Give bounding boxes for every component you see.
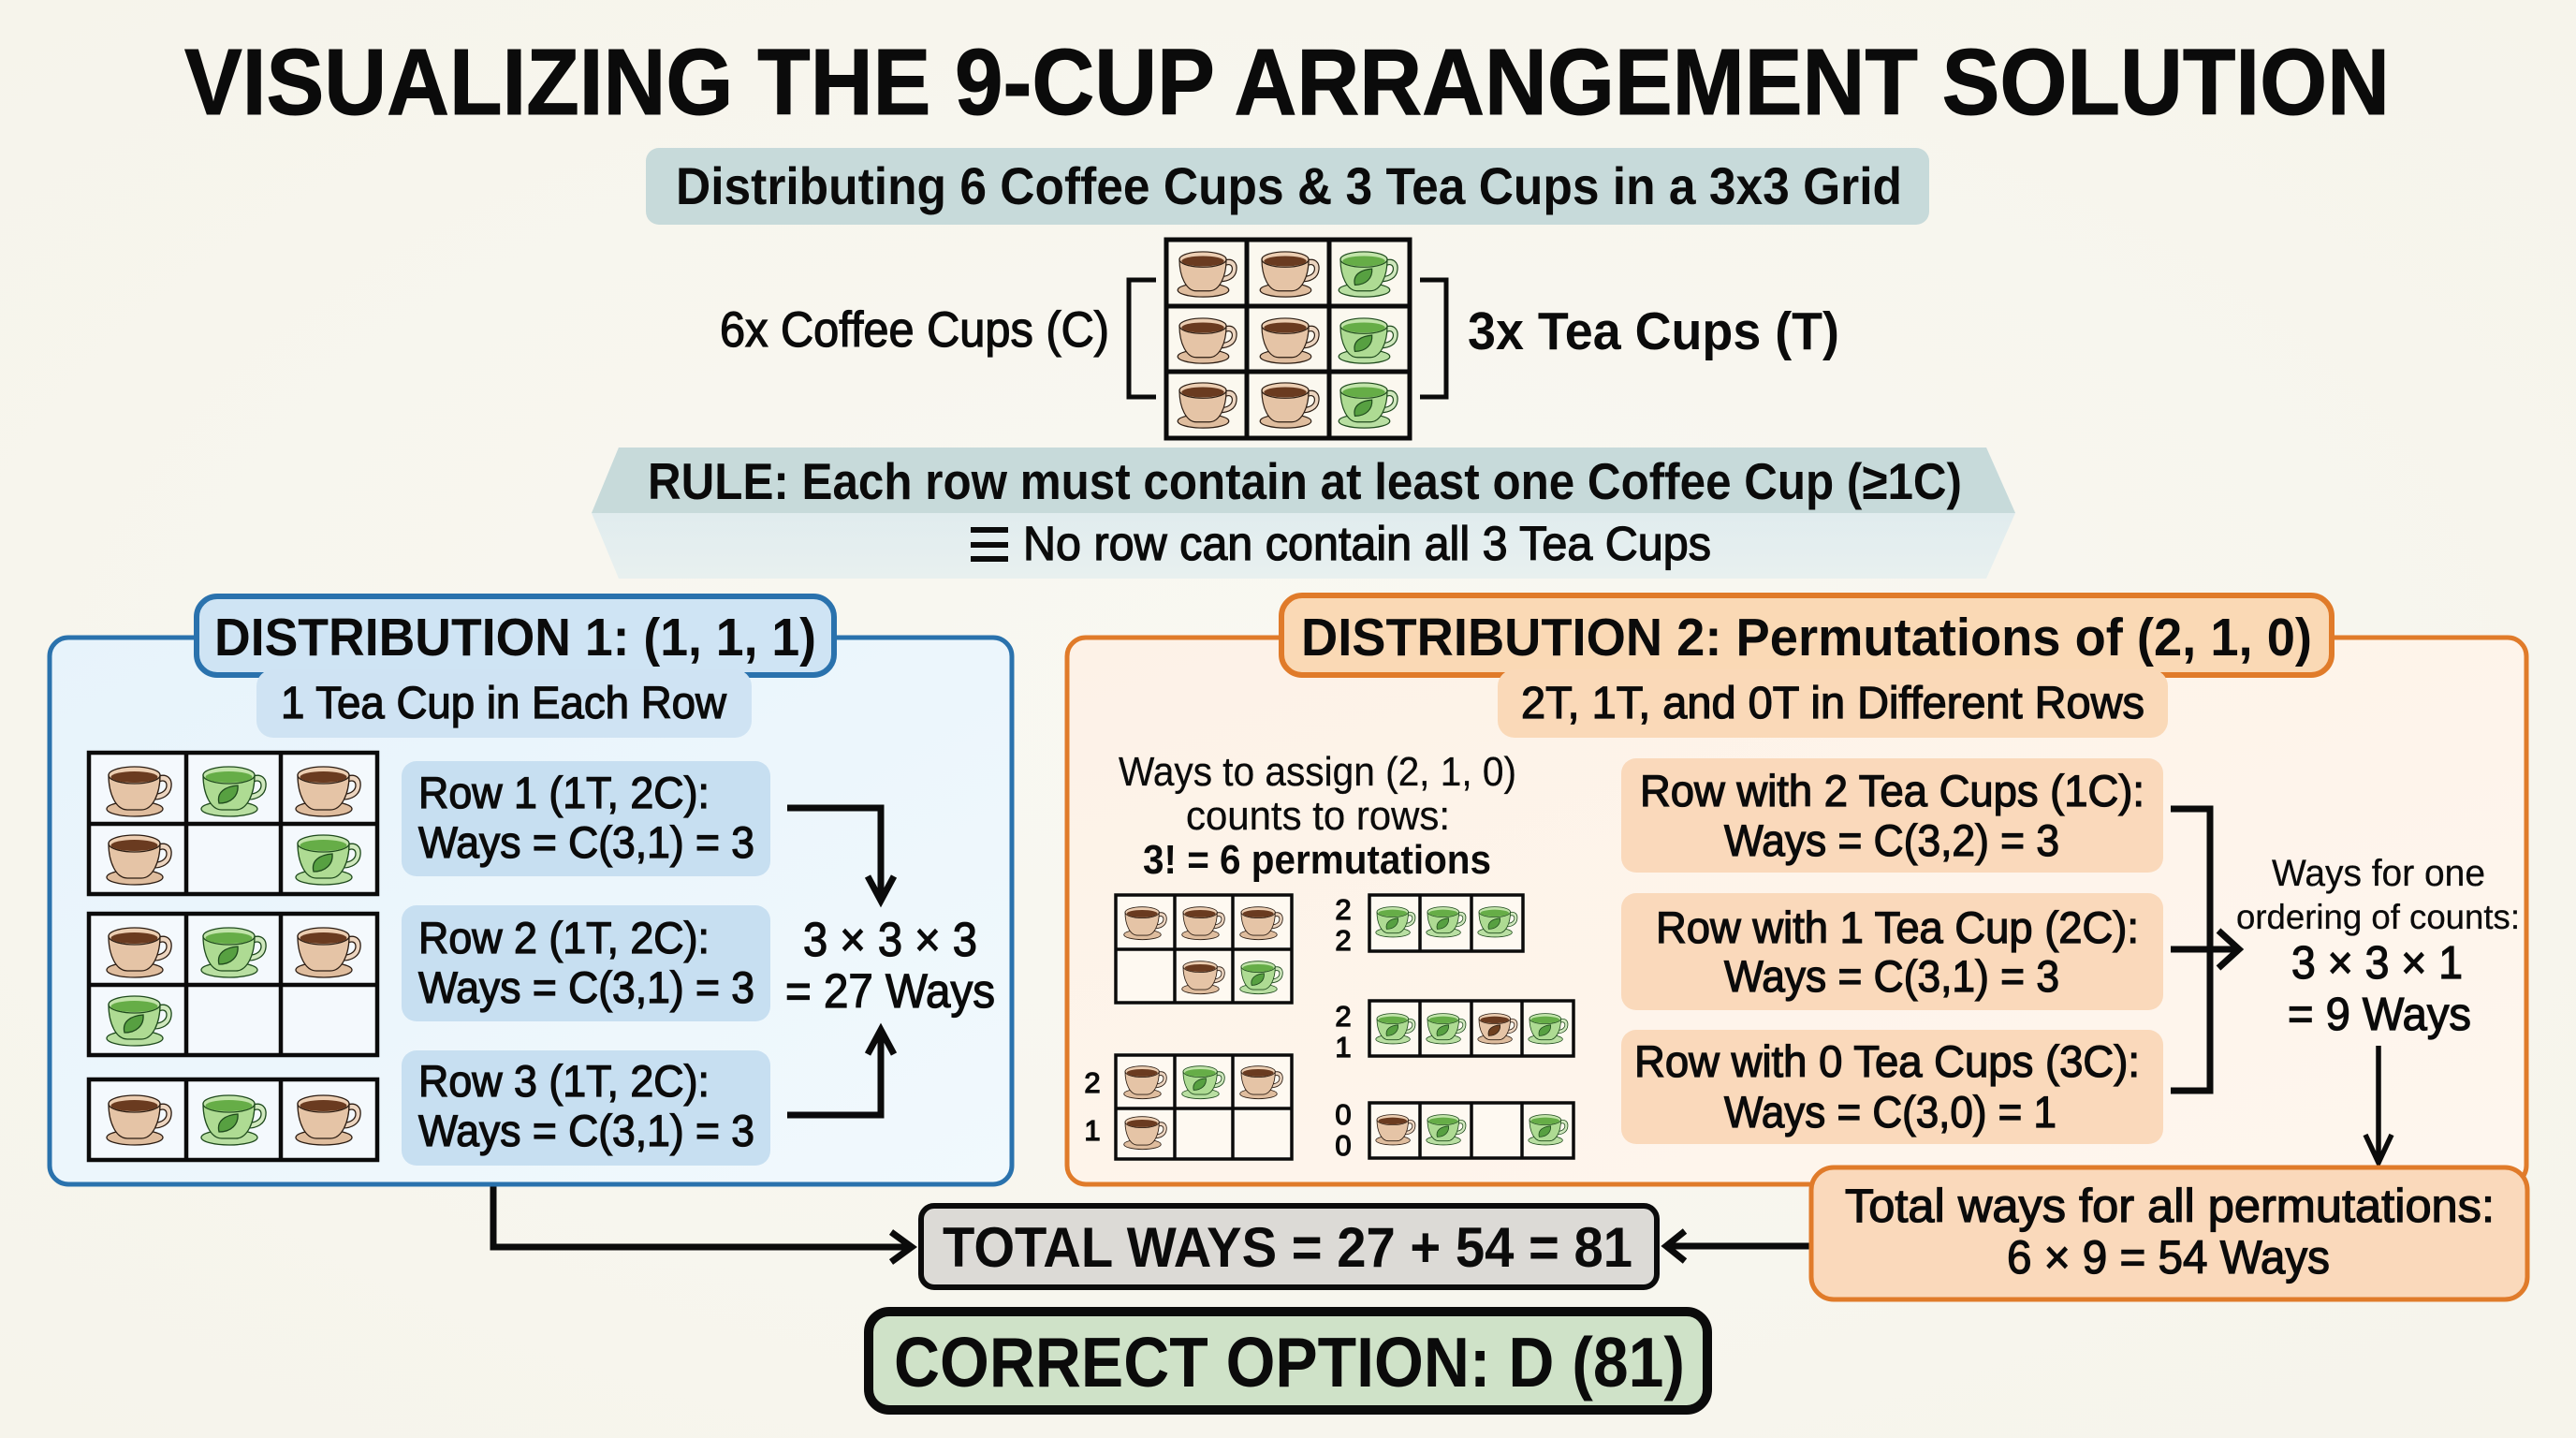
mini grid E with row counts: 0 bbox=[1335, 1098, 1352, 1131]
mini grid B with row counts: 2 bbox=[1084, 1066, 1101, 1099]
mini grid C with row counts bbox=[1335, 893, 1523, 957]
mini grid E with row counts bbox=[1335, 1098, 1573, 1162]
grid: row 2 arrangements bbox=[89, 914, 377, 1055]
text: ways to assign counts bbox=[1119, 749, 1516, 883]
result: ways for one ordering bbox=[2236, 853, 2520, 1040]
label: coffee cups count: 6x Coffee Cups (C) bbox=[720, 302, 1109, 358]
mini grid B with row counts: 1 bbox=[1084, 1114, 1101, 1147]
mini grid D with row counts bbox=[1335, 1000, 1573, 1064]
mini grid D with row counts: 2 bbox=[1335, 1000, 1352, 1033]
title: VISUALIZING THE 9-CUP ARRANGEMENT SOLUTION bbox=[184, 30, 2390, 135]
heading: distribution 2: DISTRIBUTION 2: Permutations of (2, 1, 0) bbox=[1301, 608, 2312, 668]
grid: row 1 arrangements bbox=[89, 753, 377, 894]
row 1 ways: Ways = C(3,1) = 3 bbox=[418, 817, 754, 867]
label: tea cups count: 3x Tea Cups (T) bbox=[1468, 301, 1839, 361]
subtitle banner: Distributing 6 Coffee Cups & 3 Tea Cups in a 3x3 Grid bbox=[676, 156, 1902, 215]
mini grid E with row counts: 0 bbox=[1335, 1129, 1352, 1162]
mini grid B with row counts bbox=[1084, 1055, 1292, 1159]
row with 1 tea cup bbox=[1621, 893, 2163, 1010]
connector: distribution 1 to total bbox=[493, 1183, 912, 1262]
panel: distribution 1 bbox=[50, 596, 1012, 1184]
result: ways for one ordering: Ways for one bbox=[2272, 853, 2485, 894]
arrow: row 3 to product bbox=[787, 1030, 894, 1115]
mini grid D with row counts: 1 bbox=[1335, 1031, 1352, 1064]
result: 27 ways: 3 × 3 × 3 bbox=[803, 913, 977, 966]
subheading: 2T 1T 0T: 2T, 1T, and 0T in Different Rows bbox=[1521, 679, 2144, 728]
subheading: 1 tea cup in each row: 1 Tea Cup in Each Row bbox=[281, 679, 726, 728]
text: ways to assign counts: counts to rows: bbox=[1186, 793, 1450, 839]
row with 1 tea cup: Row with 1 Tea Cup (2C): bbox=[1656, 902, 2139, 952]
grid: row 3 arrangements bbox=[89, 1079, 377, 1160]
row with 1 tea cup: Ways = C(3,1) = 3 bbox=[1724, 951, 2059, 1001]
result: ways for one ordering: 3 × 3 × 1 bbox=[2291, 938, 2463, 989]
rule banner bbox=[592, 448, 2015, 579]
row 2 ways: Row 2 (1T, 2C): bbox=[418, 913, 710, 962]
row with 0 tea cups: Ways = C(3,0) = 1 bbox=[1724, 1087, 2056, 1137]
panel: distribution 2 bbox=[1067, 595, 2526, 1184]
row 3 ways: Ways = C(3,1) = 3 bbox=[418, 1106, 754, 1155]
heading: distribution 1: DISTRIBUTION 1: (1, 1, 1) bbox=[214, 608, 816, 668]
text: ways to assign counts: Ways to assign (2, 1, 0) bbox=[1119, 749, 1516, 795]
callout: total ways for all permutations: Total ways for all permutations: bbox=[1845, 1180, 2495, 1232]
text: ways to assign counts: 3! = 6 permutations bbox=[1143, 837, 1491, 883]
row with 2 tea cups: Row with 2 Tea Cups (1C): bbox=[1640, 766, 2144, 815]
left bracket bbox=[1129, 280, 1156, 397]
row with 0 tea cups bbox=[1621, 1030, 2163, 1144]
connector: permutations total to total ways bbox=[1666, 1231, 1813, 1261]
row with 0 tea cups: Row with 0 Tea Cups (3C): bbox=[1634, 1036, 2140, 1086]
row with 2 tea cups bbox=[1621, 758, 2163, 873]
right bracket bbox=[1420, 280, 1446, 397]
correct option box: CORRECT OPTION: D (81) bbox=[894, 1323, 1685, 1401]
row 1 ways: Row 1 (1T, 2C): bbox=[418, 768, 710, 817]
callout: total ways for all permutations bbox=[1811, 1167, 2527, 1299]
mini grid C with row counts: 2 bbox=[1335, 924, 1352, 957]
mini grid C with row counts: 2 bbox=[1335, 893, 1352, 926]
result: 27 ways bbox=[785, 913, 995, 1018]
bracket arrow to ordering result bbox=[2171, 809, 2239, 1091]
row 3 ways: Row 3 (1T, 2C): bbox=[418, 1056, 710, 1106]
row 2 ways bbox=[402, 905, 770, 1021]
row 3 ways bbox=[402, 1050, 770, 1166]
subheading: 1 tea cup in each row bbox=[256, 669, 752, 738]
result: ways for one ordering: = 9 Ways bbox=[2288, 990, 2471, 1040]
row with 2 tea cups: Ways = C(3,2) = 3 bbox=[1724, 815, 2059, 865]
row 2 ways: Ways = C(3,1) = 3 bbox=[418, 962, 754, 1012]
callout: total ways for all permutations: 6 × 9 = 54 Ways bbox=[2007, 1231, 2330, 1284]
total ways box: TOTAL WAYS = 27 + 54 = 81 bbox=[943, 1216, 1632, 1279]
arrow: row 1 to product bbox=[787, 808, 894, 901]
main 3x3 cup grid bbox=[1166, 240, 1410, 438]
arrow: down to permutations total bbox=[2365, 1046, 2392, 1163]
subheading: 2T 1T 0T bbox=[1498, 669, 2168, 738]
row 1 ways bbox=[402, 761, 770, 876]
result: 27 ways: = 27 Ways bbox=[785, 964, 995, 1018]
rule banner: RULE: Each row must contain at least one Coffee Cup (≥1C) bbox=[648, 452, 1962, 510]
rule banner: No row can contain all 3 Tea Cups bbox=[1023, 517, 1711, 570]
result: ways for one ordering: ordering of counts: bbox=[2236, 898, 2520, 936]
mini grid A bbox=[1116, 895, 1292, 1003]
